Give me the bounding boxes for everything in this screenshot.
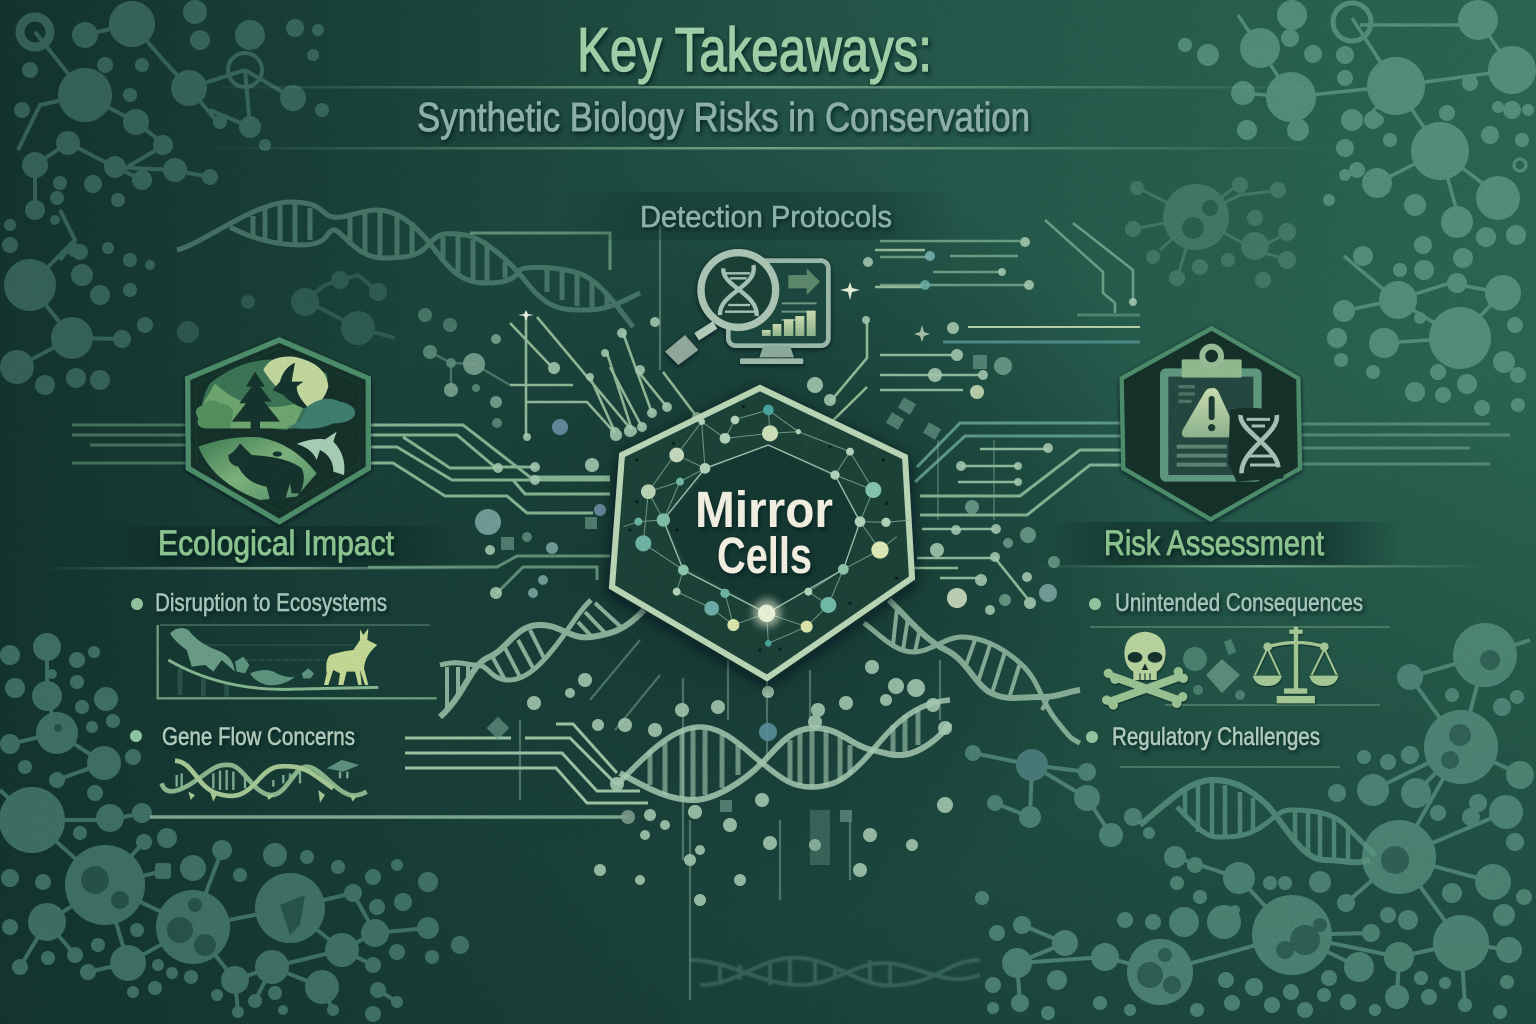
inner dark core <box>665 445 860 612</box>
subtitle: Synthetic Biology Risks in Conservation <box>417 94 1030 140</box>
molecule: virus shape upper right <box>1125 177 1296 288</box>
DNA helix: left of core <box>440 600 644 717</box>
sparkles <box>518 282 930 616</box>
DNA helix: upper left <box>177 202 640 327</box>
hexagon frame <box>612 388 912 678</box>
bullet text: Disruption to Ecosystems <box>155 589 387 617</box>
faint DNA bottom centre <box>690 958 980 986</box>
icon: ecosystem hexagon <box>188 340 368 522</box>
heading: Detection Protocols: Detection Protocols <box>640 199 892 234</box>
warning triangle <box>1182 388 1237 437</box>
molecule network: bottom left <box>0 633 469 1022</box>
mottling inside big nodes <box>54 724 305 956</box>
icon: skull and crossbones <box>1102 632 1188 710</box>
DNA <box>1228 408 1285 482</box>
molecule network: top right <box>1178 0 1536 416</box>
molecule network: bottom right <box>965 623 1534 1020</box>
title: Key Takeaways: <box>577 16 932 85</box>
heading: Ecological Impact <box>158 524 394 563</box>
DNA helix: right of core <box>864 600 1080 743</box>
bullet <box>1089 598 1101 610</box>
bullet <box>1086 731 1098 743</box>
bullet text: Gene Flow Concerns <box>162 723 355 751</box>
chart: declining species <box>158 625 437 698</box>
centre hexagon: Mirror Cells <box>612 388 912 678</box>
circuit traces: left <box>72 233 648 817</box>
icon: magnifier and monitor <box>665 253 828 365</box>
core label <box>695 481 833 584</box>
heading band <box>1050 522 1400 566</box>
DNA helix: lower right <box>1140 780 1375 862</box>
bullet text: Unintended Consequences <box>1115 589 1363 617</box>
magnifier lens <box>701 253 776 327</box>
DNA in lens <box>720 265 757 316</box>
bullet <box>130 730 142 742</box>
molecule network: top left <box>0 0 395 395</box>
core label: Cells <box>717 527 812 584</box>
network ring <box>623 405 910 652</box>
circuit traces and nodes around the core <box>418 225 1137 1000</box>
clipboard <box>1160 347 1262 482</box>
heading: Risk Assessment <box>1104 524 1324 563</box>
heading: Detection Protocols <box>560 192 960 240</box>
bullet <box>131 598 143 610</box>
bullet text: Regulatory Challenges <box>1112 723 1320 751</box>
icon: gene flow DNA <box>162 760 367 803</box>
DNA helix: below core <box>617 700 950 800</box>
heading band <box>100 526 460 566</box>
icon: clipboard risk hexagon <box>1122 328 1300 519</box>
circuit traces: right <box>880 220 1510 767</box>
magnifier handle <box>665 325 715 365</box>
glow node <box>753 599 781 627</box>
monitor <box>728 261 828 364</box>
core label: Mirror <box>695 481 833 538</box>
panel: Ecological Impact <box>40 340 510 803</box>
mottling inside big nodes <box>1137 650 1500 994</box>
icon: scales of justice <box>1253 627 1339 703</box>
panel: Risk Assessment <box>1030 328 1490 751</box>
decorative diamond <box>1183 639 1245 700</box>
